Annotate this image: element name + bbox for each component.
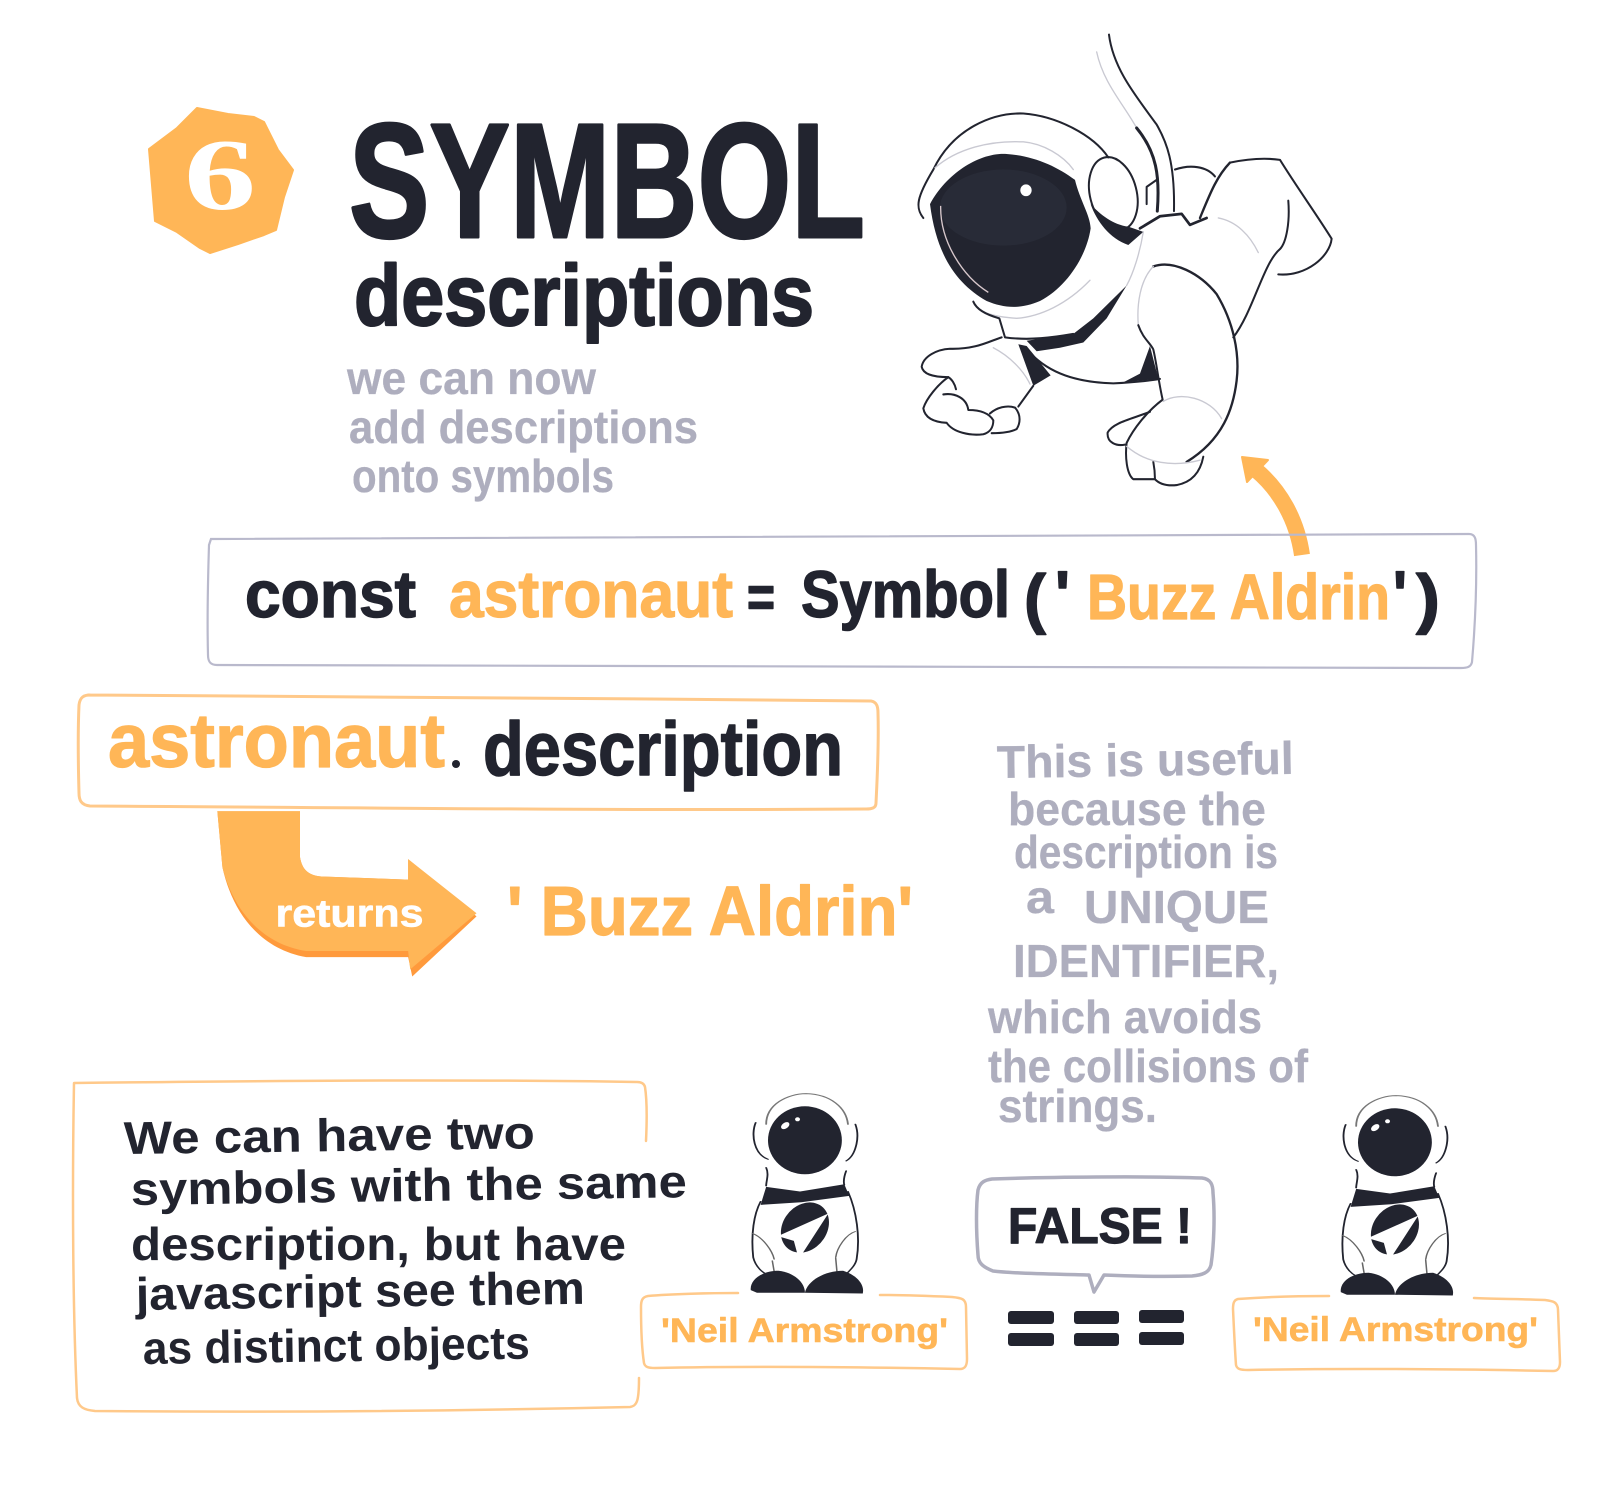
arrow: points to astronaut [1242, 457, 1302, 555]
panel: two symbols note [73, 1080, 687, 1412]
intro text: onto symbols [352, 450, 614, 502]
panel: astronaut.description [78, 695, 878, 810]
expression text: astronaut [108, 699, 445, 784]
note text: description, but have [131, 1218, 626, 1270]
icon: visor [930, 154, 1091, 307]
code text: ( [1024, 561, 1046, 635]
explanation text: This is useful [996, 732, 1294, 788]
code text: = [747, 565, 775, 630]
explanation text: strings. [998, 1080, 1157, 1132]
badge: number 6 [149, 108, 293, 253]
intro text: we can now [346, 352, 596, 404]
code text: Symbol [801, 557, 1010, 631]
returned value: ' Buzz Aldrin' [507, 872, 913, 950]
illustration: floating astronaut [918, 35, 1332, 485]
note text [123, 1106, 687, 1374]
body and shadows [1018, 159, 1332, 386]
expression text: description [483, 707, 843, 792]
helmet and cable [918, 35, 1174, 339]
arrow: returns [217, 811, 477, 977]
note text: as distinct objects [142, 1317, 530, 1374]
code text: const [245, 557, 416, 631]
explanation text: the collisions of [988, 1040, 1309, 1092]
code text: Buzz Aldrin [1087, 561, 1390, 633]
label: left Neil Armstrong: 'Neil Armstrong' [661, 1312, 948, 1350]
label: left Neil Armstrong [641, 1293, 967, 1369]
note text: We can have two [123, 1106, 535, 1164]
code text [245, 557, 1440, 635]
code text: ' [1393, 557, 1407, 631]
explanation text: description is [1014, 826, 1278, 878]
explanation text [987, 732, 1309, 1132]
icon: right small astronaut [1341, 1096, 1453, 1295]
explanation text: IDENTIFIER, [1013, 935, 1279, 987]
explanation text: a [1026, 871, 1054, 923]
label: right Neil Armstrong: 'Neil Armstrong' [1253, 1311, 1538, 1349]
badge: number 6: 6 [184, 119, 256, 232]
subtitle: descriptions: descriptions [354, 248, 814, 344]
code text: ' [1055, 557, 1070, 631]
panel: code declaration [208, 534, 1476, 668]
expression text [108, 699, 843, 792]
right arm [1108, 265, 1237, 485]
title: SYMBOL: SYMBOL [349, 89, 865, 272]
arrow: returns: returns [276, 893, 423, 936]
code text: ) [1416, 561, 1440, 635]
explanation text: UNIQUE [1084, 881, 1269, 933]
icon: triple equals [1008, 1310, 1184, 1346]
left hand [922, 337, 1033, 435]
explanation text: which avoids [987, 991, 1262, 1043]
label: right Neil Armstrong [1233, 1296, 1560, 1371]
icon: left small astronaut [751, 1094, 863, 1293]
speech bubble: FALSE!: FALSE ! [1008, 1198, 1192, 1254]
note text: symbols with the same [130, 1155, 687, 1215]
code text: astronaut [449, 557, 733, 631]
intro text: add descriptions [349, 401, 698, 453]
explanation text: because the [1008, 783, 1266, 835]
speech bubble: FALSE! [976, 1177, 1214, 1292]
intro text [346, 352, 698, 502]
note text: javascript see them [134, 1262, 585, 1320]
